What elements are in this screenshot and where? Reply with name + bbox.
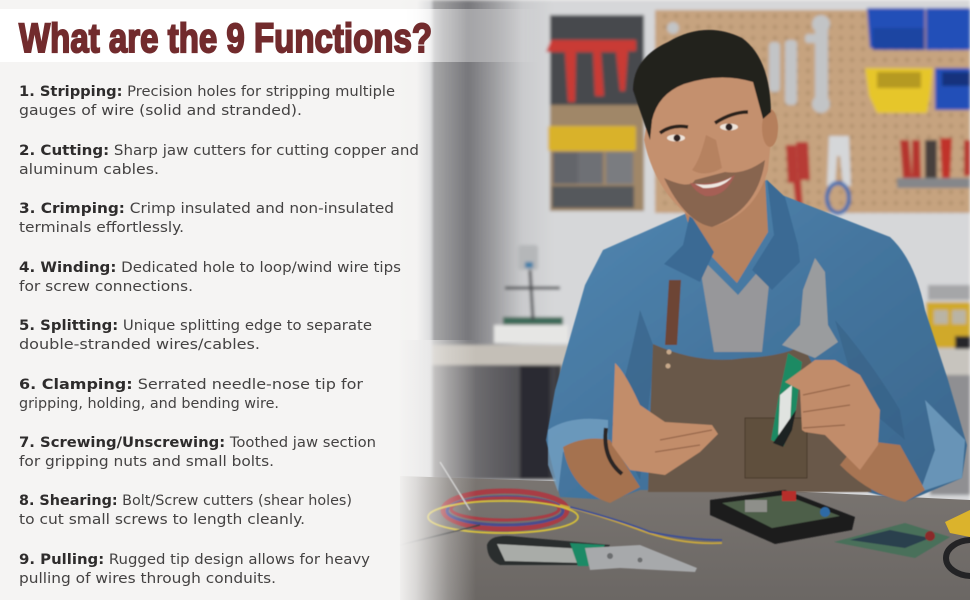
circuit box — [710, 490, 855, 544]
pliers on table — [487, 536, 697, 572]
pegboard — [655, 10, 970, 213]
apron — [648, 344, 872, 492]
smile — [690, 175, 735, 196]
left fade overlay upper — [396, 0, 434, 340]
4. winding: 4. Winding: Dedicated hole to loop/wind wire tips — [19, 260, 401, 276]
man — [546, 30, 967, 503]
6. clamping — [19, 377, 363, 412]
9. pulling: pulling of wires through conduits. — [19, 571, 276, 587]
5. splitting — [19, 318, 372, 353]
shirt collar — [664, 180, 800, 290]
left text panel — [0, 0, 397, 600]
storage bins — [865, 8, 970, 113]
5. splitting: double-stranded wires/cables. — [19, 337, 260, 353]
8. shearing: to cut small screws to length cleanly. — [19, 512, 305, 528]
3. crimping — [19, 201, 394, 236]
2. cutting: aluminum cables. — [19, 162, 159, 178]
3. crimping: 3. Crimping: Crimp insulated and non-insulated — [19, 201, 394, 217]
face — [644, 70, 772, 227]
6. clamping: gripping, holding, and bending wire. — [19, 396, 279, 412]
7. screwing/unscrewing: for gripping nuts and small bolts. — [19, 454, 274, 470]
hair — [633, 30, 771, 140]
7. screwing/unscrewing: 7. Screwing/Unscrewing: Toothed jaw section — [19, 435, 376, 451]
tool panel — [546, 15, 644, 211]
1. stripping: 1. Stripping: Precision holes for stripping multiple — [19, 84, 395, 100]
sleeve cuff highlight — [548, 400, 965, 492]
9. pulling — [19, 552, 370, 587]
wristband — [605, 428, 622, 474]
right hand — [785, 360, 880, 470]
7. screwing/unscrewing — [19, 435, 376, 470]
apron rivets — [666, 350, 672, 368]
left forearm — [563, 439, 640, 503]
title: What are the 9 Functions? — [19, 15, 432, 61]
hanging pliers — [786, 136, 970, 213]
function list — [19, 84, 419, 587]
title band — [0, 9, 540, 62]
1. stripping — [19, 84, 395, 119]
yellow object — [945, 510, 970, 537]
finger creases right — [803, 385, 850, 428]
3. crimping: terminals effortlessly. — [19, 220, 184, 236]
ear — [762, 109, 778, 147]
workshop background — [400, 0, 970, 600]
right forearm — [840, 440, 925, 502]
4. winding — [19, 260, 401, 295]
nose — [692, 135, 722, 174]
hanging wrenches — [667, 15, 830, 113]
beard — [664, 160, 765, 227]
brows and eyes — [660, 112, 748, 142]
5. splitting: 5. Splitting: Unique splitting edge to separate — [19, 318, 372, 334]
torso and sleeves — [546, 180, 967, 502]
1. stripping: gauges of wire (solid and stranded). — [19, 103, 302, 119]
circuit board — [834, 523, 950, 558]
2. cutting — [19, 143, 419, 178]
bench equipment — [494, 245, 568, 343]
6. clamping: 6. Clamping: Serrated needle-nose tip for — [19, 377, 363, 393]
teeth — [695, 177, 732, 188]
yellow crate — [926, 285, 970, 349]
left fade overlay lower — [396, 340, 476, 600]
9. pulling: 9. Pulling: Rugged tip design allows for heavy — [19, 552, 370, 568]
2. cutting: 2. Cutting: Sharp jaw cutters for cutting copper and — [19, 143, 419, 159]
black cable — [946, 540, 970, 576]
neck — [678, 180, 768, 283]
pliers in hand — [771, 258, 838, 447]
wire coil — [400, 462, 722, 545]
8. shearing — [19, 493, 352, 528]
workbench shelf — [432, 345, 970, 495]
table — [400, 476, 970, 600]
apron pocket — [745, 418, 807, 478]
shirt fold shading — [612, 310, 905, 480]
apron strap — [665, 280, 681, 345]
t-shirt — [698, 255, 772, 352]
8. shearing: 8. Shearing: Bolt/Screw cutters (shear holes) — [19, 493, 352, 509]
finger creases — [655, 430, 712, 452]
left hand — [612, 363, 718, 475]
4. winding: for screw connections. — [19, 279, 193, 295]
